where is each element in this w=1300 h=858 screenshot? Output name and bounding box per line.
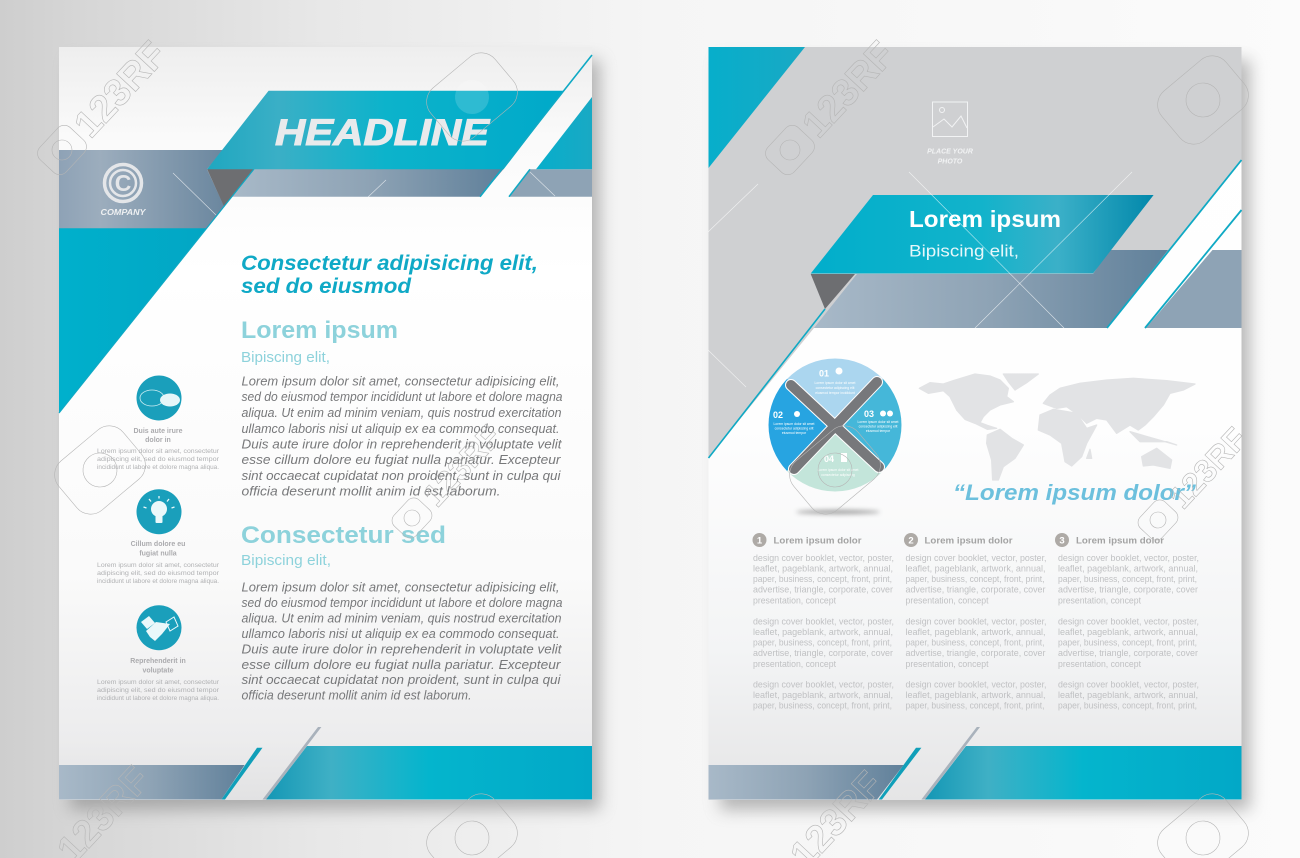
chart: circular four part diagram: consectetur adipiscing elit (859, 424, 897, 428)
panel: right page (708, 47, 1242, 800)
feature one text: adipiscing elit, sed do eiusmod tempor (97, 456, 220, 463)
chart: circular four part diagram: eiusmod tempor (866, 429, 891, 433)
headline ribbon (207, 91, 564, 169)
subheading (241, 251, 538, 298)
column two: design cover booklet, vector, poster, (906, 616, 1046, 626)
feature one text: Lorem ipsum dolor sit amet, consectetur (97, 448, 220, 455)
panel: right page shadow (720, 60, 1250, 810)
column one: paper, business, concept, front, print, (753, 636, 892, 648)
text block: paragraph two: officia deserunt mollit anim id est laborum. (242, 688, 472, 702)
feature three text: incididunt ut labore et dolore magna aliqua. (97, 695, 219, 702)
footer grey sliver (921, 727, 980, 800)
column two: paper, business, concept, front, print, (906, 573, 1044, 584)
ribbon title: Lorem ipsum (909, 206, 1061, 232)
text block: paragraph one: ullamco laboris nisi ut aliquip ex ea commodo consequat. (242, 421, 560, 436)
feature two text: adipiscing elit, sed do eiusmod tempor (97, 570, 220, 577)
watermark: stock logos: 123RF (1162, 421, 1254, 515)
column two: design cover booklet, vector, poster, (906, 552, 1046, 563)
right stripe line lower (1145, 210, 1242, 328)
icon: company logo (104, 164, 142, 202)
right steel shape (1146, 250, 1242, 328)
text block: paragraph one: Lorem ipsum dolor sit amet, consectetur adipisicing elit, (242, 374, 560, 388)
column one: paper, business, concept, front, print, (753, 700, 892, 710)
column two: 2 (908, 536, 914, 546)
column three: leaflet, pageblank, artwork, annual, (1058, 626, 1198, 637)
feature three text: adipiscing elit, sed do eiusmod tempor (97, 687, 220, 694)
footer grey sliver (262, 727, 321, 800)
column one (752, 533, 894, 710)
column one: paper, business, concept, front, print, (753, 573, 892, 584)
text block: paragraph two: sed do eiusmod tempor incididunt ut labore et dolore magna (242, 595, 562, 610)
column three: presentation, concept (1058, 658, 1141, 669)
world map (919, 374, 1195, 480)
company label: COMPANY (100, 208, 146, 217)
subheading: Consectetur adipisicing elit, (241, 251, 538, 275)
column three: paper, business, concept, front, print, (1058, 636, 1197, 648)
dark ribbon fold (811, 274, 855, 309)
column three: presentation, concept (1058, 594, 1141, 606)
panel: left page shadow (70, 60, 600, 810)
right corner steel shape (509, 169, 592, 197)
column three: leaflet, pageblank, artwork, annual, (1058, 689, 1198, 700)
chart: circular four part diagram: Lorem ipsum dolor sit amet (818, 468, 858, 472)
column one: advertise, triangle, corporate, cover (753, 584, 893, 594)
feature three text: Reprehenderit in (130, 658, 186, 665)
column one: leaflet, pageblank, artwork, annual, (753, 626, 893, 637)
text block: paragraph two: esse cillum dolore eu fugiat nulla pariatur. Excepteur (242, 657, 561, 672)
icon: speech bubbles (136, 376, 182, 420)
column three: design cover booklet, vector, poster, (1058, 678, 1199, 690)
column three: design cover booklet, vector, poster, (1058, 616, 1199, 626)
column two: paper, business, concept, front, print, (906, 700, 1044, 710)
steel ribbon band (814, 250, 1168, 328)
feature two text: incididunt ut labore et dolore magna aliqua. (97, 578, 219, 585)
column three: advertise, triangle, corporate, cover (1058, 647, 1198, 658)
text block: paragraph two (242, 580, 563, 702)
text block: paragraph one: Duis aute irure dolor in reprehenderit in voluptate velit (242, 436, 563, 452)
chart: circular four part diagram: Lorem ipsum dolor sit amet (858, 420, 898, 424)
chart: circular four part diagram: eiusmod tempor (782, 431, 807, 435)
text block: paragraph one (242, 374, 563, 498)
feature one text (97, 428, 220, 471)
column two (904, 533, 1046, 710)
text block: paragraph two: Duis aute irure dolor in reprehenderit in voluptate velit (242, 642, 563, 656)
photo caption (927, 148, 973, 166)
icon: company logo: C (115, 170, 131, 196)
text block: paragraph one: sed do eiusmod tempor incididunt ut labore et dolore magna (242, 389, 562, 404)
watermark: stock logos: 123RF (795, 34, 903, 146)
chart: circular four part diagram: 03 (864, 409, 874, 419)
chart: circular four part diagram: consectetur adipiscing (821, 473, 855, 477)
chart: circular four part diagram: Lorem ipsum dolor sit amet (815, 381, 855, 385)
ribbon subtitle: Bipiscing elit, (909, 242, 1019, 260)
section heading: Lorem ipsum (241, 317, 398, 366)
column one: design cover booklet, vector, poster, (753, 552, 894, 563)
feature two text: Cillum dolore eu (131, 541, 185, 548)
column one: advertise, triangle, corporate, cover (753, 647, 893, 658)
headline: HEADLINE (275, 112, 490, 153)
feature three text: voluptate (142, 668, 174, 674)
teal diagonal line (59, 169, 254, 413)
grey company band (59, 150, 224, 228)
text block: paragraph one: esse cillum dolore eu fugiat nulla pariatur. Excepteur (242, 452, 561, 467)
feature one text: dolor in (145, 437, 171, 444)
chart: circular four part diagram: 02 (773, 410, 783, 420)
column three: paper, business, concept, front, print, (1058, 573, 1197, 584)
segment 01 (787, 359, 883, 425)
segment 04 (787, 425, 883, 491)
text block: paragraph two: sint occaecat cupidatat non proident, sunt in culpa qui (242, 672, 562, 687)
column two: Lorem ipsum dolor (924, 536, 1013, 546)
steel ribbon band (232, 169, 504, 197)
segment 02 (769, 379, 835, 471)
right stripe line upper (480, 55, 592, 197)
text block: paragraph two: ullamco laboris nisi ut aliquip ex ea commodo consequat. (242, 626, 560, 641)
column two: leaflet, pageblank, artwork, annual, (906, 562, 1046, 574)
teal ribbon (811, 195, 1154, 274)
footer teal sliver (221, 748, 262, 800)
section heading: Lorem ipsum: Bipiscing elit, (241, 350, 330, 366)
right stripe line upper (1107, 160, 1242, 328)
column two: leaflet, pageblank, artwork, annual, (906, 626, 1046, 637)
column three: design cover booklet, vector, poster, (1058, 552, 1199, 563)
column one: leaflet, pageblank, artwork, annual, (753, 689, 893, 700)
column one: Lorem ipsum dolor (774, 536, 862, 546)
chart: circular four part diagram: consectetur adipiscing elit (775, 426, 813, 430)
photo caption: PHOTO (938, 158, 963, 166)
footer teal band (266, 746, 592, 800)
icon: photo placeholder (932, 102, 968, 136)
dark ribbon fold (207, 169, 254, 206)
feature one text: Duis aute irure (133, 428, 183, 435)
section heading: Consectetur sed: Consectetur sed (241, 522, 446, 549)
chart: circular four part diagram: eiusmod tempor incididunt (815, 391, 855, 395)
chart: circular four part diagram (769, 359, 901, 514)
panel: left page (59, 47, 592, 800)
chart: circular four part diagram: consectetur adipiscing elit (816, 386, 854, 390)
icon: light bulb (136, 489, 182, 534)
column three: leaflet, pageblank, artwork, annual, (1058, 562, 1198, 574)
column one: presentation, concept (753, 594, 836, 606)
section heading: Consectetur sed: Bipiscing elit, (241, 553, 331, 569)
grey cross arms (791, 382, 879, 469)
footer teal sliver (879, 748, 921, 800)
watermark: stock logos: 123RF (67, 34, 175, 146)
column two: leaflet, pageblank, artwork, annual, (906, 689, 1046, 700)
column three: Lorem ipsum dolor (1076, 536, 1164, 546)
text block: paragraph two: aliqua. Ut enim ad minim veniam, quis nostrud exercitation (242, 610, 562, 626)
left diagonal line (708, 309, 825, 458)
quote: “Lorem ipsum dolor” (953, 480, 1197, 505)
feature three text (97, 658, 220, 702)
column two: presentation, concept (906, 658, 989, 669)
column one: presentation, concept (753, 658, 836, 669)
text block: paragraph two: Lorem ipsum dolor sit amet, consectetur adipisicing elit, (242, 580, 560, 594)
photo caption: PLACE YOUR (927, 148, 973, 156)
section heading: Consectetur sed (241, 522, 446, 569)
grey photo area (708, 47, 1242, 458)
right stripe line lower (509, 169, 530, 197)
text block: paragraph one: sint occaecat cupidatat non proident, sunt in culpa qui (242, 468, 562, 483)
feature two text: Lorem ipsum dolor sit amet, consectetur (97, 562, 220, 569)
teal side triangle (59, 228, 207, 413)
text block: paragraph one: aliqua. Ut enim ad minim veniam, quis nostrud exercitation (242, 405, 562, 420)
segment 03 (835, 379, 901, 471)
feature one text: incididunt ut labore et dolore magna aliqua. (97, 464, 219, 471)
footer steel band (708, 765, 904, 800)
column one: 1 (757, 536, 763, 546)
column three: advertise, triangle, corporate, cover (1058, 584, 1198, 594)
column two: paper, business, concept, front, print, (906, 636, 1044, 648)
feature two text (97, 541, 220, 585)
column one: design cover booklet, vector, poster, (753, 678, 894, 690)
watermark: stock logos: 123RF (416, 419, 508, 513)
feature three text: Lorem ipsum dolor sit amet, consectetur (97, 679, 220, 686)
text block: paragraph one: officia deserunt mollit anim id est laborum. (242, 484, 500, 498)
section heading: Lorem ipsum: Lorem ipsum (241, 317, 398, 344)
column one: leaflet, pageblank, artwork, annual, (753, 562, 893, 574)
chart: circular four part diagram: 01 (819, 368, 829, 378)
right corner teal shape (536, 97, 592, 169)
column two: advertise, triangle, corporate, cover (906, 647, 1046, 658)
icon: handshake (136, 605, 182, 650)
top left teal triangle (708, 47, 805, 168)
column three (1055, 533, 1199, 710)
feature two text: fugiat nulla (139, 550, 177, 558)
column two: design cover booklet, vector, poster, (906, 678, 1046, 690)
column two: advertise, triangle, corporate, cover (906, 584, 1046, 594)
subheading: sed do eiusmod (241, 274, 412, 298)
footer teal band (925, 746, 1242, 800)
footer steel band (59, 765, 245, 800)
column three: 3 (1059, 536, 1065, 546)
column one: design cover booklet, vector, poster, (753, 616, 894, 626)
column two: presentation, concept (906, 594, 989, 606)
chart: circular four part diagram: 04 (824, 454, 834, 464)
column three: paper, business, concept, front, print, (1058, 700, 1197, 710)
chart: circular four part diagram: Lorem ipsum dolor sit amet (774, 422, 814, 426)
